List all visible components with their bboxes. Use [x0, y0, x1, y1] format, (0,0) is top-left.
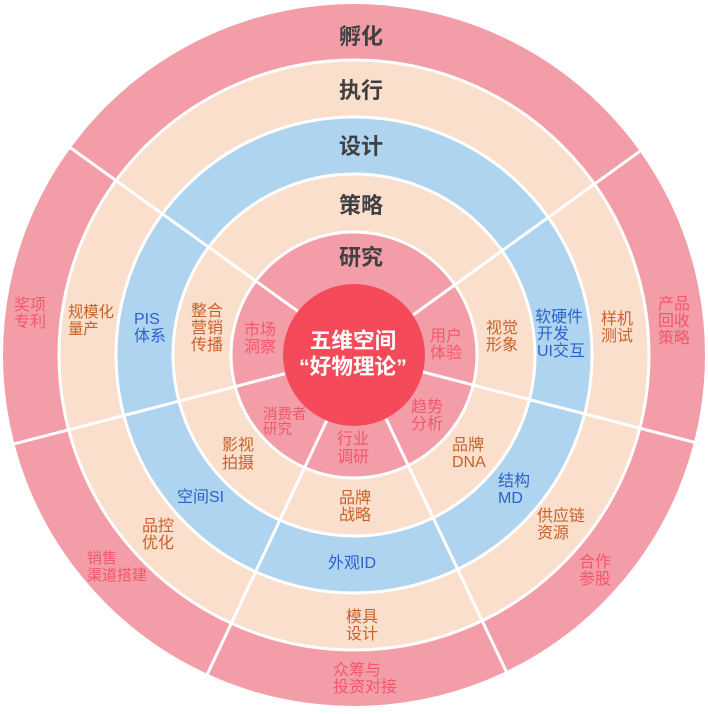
- label: brand strategy: 战略: [339, 506, 371, 524]
- label: integrated marketing: 营销: [191, 319, 223, 337]
- label: consumer research: 消费者: [263, 406, 306, 423]
- core circle with title: 五维空间: [310, 328, 396, 353]
- label: industry research: 行业: [337, 430, 369, 448]
- label: structure MD: MD: [498, 490, 523, 507]
- label: space SI: 空间SI: [177, 488, 224, 506]
- heading: research: 研究: [339, 245, 383, 270]
- label: sales channels: 销售: [87, 550, 117, 567]
- ring: research: [231, 232, 477, 478]
- heading: incubation: 孵化: [339, 24, 383, 49]
- label: crowdfunding and investment: 投资对接: [333, 678, 397, 696]
- label: mould design: 设计: [346, 625, 378, 643]
- label: software and hardware development: UI交互: [537, 342, 585, 360]
- spokes dividing the sectors: [13, 146, 695, 675]
- heading: design: 设计: [339, 134, 383, 159]
- ring: execution: [59, 60, 649, 650]
- label: brand DNA: 品牌: [452, 436, 484, 454]
- label: integrated marketing: 传播: [191, 336, 223, 354]
- label: market insight: 市场: [244, 321, 276, 339]
- label: integrated marketing: 整合: [191, 302, 223, 320]
- label: user experience: 体验: [430, 344, 462, 362]
- label: film and photography: 拍摄: [222, 454, 254, 472]
- label: cooperation and equity: 参股: [579, 570, 611, 588]
- label: quality control: 品控: [142, 517, 174, 535]
- label: trend analysis: 分析: [411, 415, 443, 433]
- label: trend analysis: 趋势: [411, 398, 443, 416]
- label: PIS system: 体系: [134, 327, 166, 345]
- label: visual image: 视觉: [486, 319, 518, 337]
- label: awards and patents: 专利: [14, 313, 46, 331]
- label: mould design: 模具: [346, 608, 378, 626]
- label: visual image: 形象: [486, 336, 518, 354]
- label: structure MD: 结构: [498, 472, 530, 490]
- heading: execution: 执行: [339, 78, 383, 103]
- core circle with title: [283, 284, 425, 426]
- label: brand strategy: 品牌: [339, 489, 371, 507]
- label: supply chain resources: 资源: [537, 524, 569, 542]
- ring: strategy: [173, 174, 535, 536]
- heading: strategy: 策略: [339, 193, 383, 218]
- label: crowdfunding and investment: 众筹与: [333, 661, 381, 679]
- label: awards and patents: 奖项: [14, 296, 46, 314]
- label: mass production: 量产: [68, 321, 99, 338]
- label: software and hardware development: 开发: [537, 325, 569, 343]
- label: consumer research: 研究: [263, 421, 292, 438]
- core circle with title: “好物理论”: [299, 354, 407, 379]
- label: cooperation and equity: 合作: [579, 553, 611, 571]
- label: product recall strategy: 策略: [658, 329, 690, 347]
- label: prototype testing: 测试: [601, 327, 633, 345]
- label: brand DNA: DNA: [452, 454, 486, 471]
- label: quality control: 优化: [142, 534, 174, 552]
- label: prototype testing: 样机: [601, 310, 633, 328]
- label: film and photography: 影视: [222, 436, 254, 454]
- label: supply chain resources: 供应链: [537, 506, 585, 525]
- label: product recall strategy: 产品: [658, 295, 690, 313]
- label: appearance ID: 外观ID: [328, 554, 376, 572]
- label: software and hardware development: 软硬件: [535, 308, 583, 326]
- label: industry research: 调研: [337, 448, 369, 466]
- label: mass production: 规模化: [68, 304, 114, 321]
- label: product recall strategy: 回收: [658, 312, 690, 330]
- label: market insight: 洞察: [244, 338, 276, 356]
- label: user experience: 用户: [430, 327, 462, 345]
- label: sales channels: 渠道搭建: [87, 567, 147, 584]
- label: PIS system: PIS: [134, 311, 160, 328]
- ring: design: [116, 117, 592, 593]
